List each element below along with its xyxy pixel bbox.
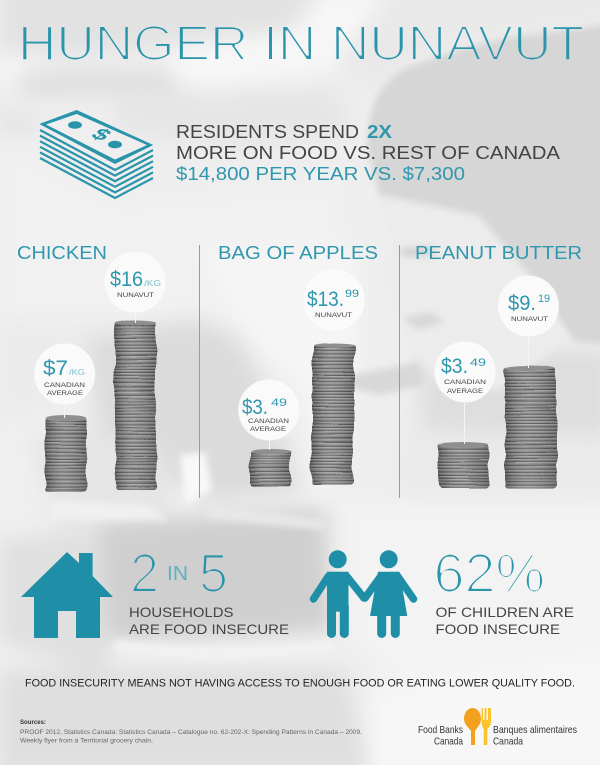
sources: Weekly flyer from a Territorial grocery chain. (20, 738, 153, 744)
headline statistic text: $14,800 PER YEAR VS. $7,300 (176, 163, 465, 184)
heading: bag of apples: BAG OF APPLES (218, 242, 378, 263)
price callout: peanut butter Canadian average: CANADIAN (444, 379, 486, 386)
coin stack: apples Nunavut (312, 342, 354, 486)
price callout: apples Canadian average: CANADIAN (248, 418, 289, 425)
price callout: apples Nunavut: NUNAVUT (315, 312, 352, 319)
coin stack: chicken Nunavut (115, 320, 156, 489)
heading: chicken: CHICKEN (17, 242, 107, 263)
coin stack: chicken Canadian average (45, 415, 86, 491)
price callout: chicken Canadian average: CANADIAN (44, 382, 85, 389)
price callout: peanut butter Nunavut: $9. (508, 292, 536, 315)
logo: Food Banks Canada: Canada (493, 736, 523, 748)
price callout: peanut butter Canadian average: $3. (441, 355, 468, 378)
icon: house (21, 552, 113, 638)
price callout: chicken Canadian average: AVERAGE (47, 390, 84, 397)
price callout: peanut butter Canadian average: AVERAGE (447, 388, 484, 395)
logo: Food Banks Canada: Banques alimentaires (493, 724, 577, 736)
logo: Food Banks Canada (418, 708, 577, 748)
logo: Food Banks Canada: Food Banks (418, 724, 463, 736)
price callout: chicken Nunavut (105, 252, 165, 323)
headline statistic text (176, 121, 561, 184)
price callout: apples Nunavut: 99 (345, 288, 359, 300)
statistic: 2 in 5 households: 5 (199, 542, 228, 604)
heading: peanut butter: PEANUT BUTTER (415, 242, 582, 263)
sources (20, 719, 362, 744)
statistic: 2 in 5 households: IN (167, 562, 188, 585)
statistic: 2 in 5 households (129, 542, 289, 637)
icon: stack of money: $ (86, 125, 117, 144)
icon: stack of money (39, 110, 153, 198)
definition statement: FOOD INSECURITY MEANS NOT HAVING ACCESS TO ENOUGH FOOD OR EATING LOWER QUALITY FOOD. (25, 678, 575, 690)
coin stack: peanut butter Canadian average (439, 442, 489, 489)
price callout: apples Canadian average: $3. (242, 396, 268, 419)
statistic: 2 in 5 households: ARE FOOD INSECURE (129, 621, 289, 637)
coin stack: peanut butter Nunavut (505, 365, 556, 489)
price callout: chicken Canadian average: $7 (43, 357, 68, 380)
statistic: 62 percent of children: FOOD INSECURE (436, 621, 560, 637)
logo: Food Banks Canada: Canada (434, 736, 463, 748)
statistic: 62 percent of children: OF CHILDREN ARE (436, 604, 574, 620)
statistic: 62 percent of children (434, 542, 574, 637)
statistic: 62 percent of children: 62% (434, 542, 545, 604)
price callout: peanut butter Nunavut: 19 (538, 293, 550, 305)
sources: Sources: (20, 719, 46, 726)
price callout: peanut butter Canadian average: 49 (470, 357, 486, 369)
price callout: chicken Canadian average: /KG (69, 368, 85, 377)
title: HUNGER IN NUNAVUT (18, 16, 584, 71)
sources: PROOF 2012, Statistics Canada: Statistics Canada – Catalogue no. 62-202-X: Spending Patterns in Canada – 2009. (20, 729, 362, 736)
headline statistic text: RESIDENTS SPEND (176, 121, 359, 142)
price callout: peanut butter Canadian average (435, 342, 495, 444)
icon: two children holding hands (314, 550, 414, 634)
price callout: apples Nunavut: $13. (307, 288, 344, 311)
price callout: chicken Canadian average (35, 344, 95, 418)
price callout: chicken Nunavut: /KG (144, 279, 161, 288)
price callout: apples Canadian average (239, 380, 299, 450)
price callout: chicken Nunavut: $16 (110, 268, 143, 291)
coin stack: apples Canadian average (250, 448, 291, 487)
price callout: peanut butter Nunavut (498, 276, 558, 368)
price callout: peanut butter Nunavut: NUNAVUT (511, 316, 548, 323)
headline statistic text: MORE ON FOOD VS. REST OF CANADA (176, 142, 561, 163)
price callout: apples Canadian average: AVERAGE (250, 426, 287, 433)
price callout: apples Canadian average: 49 (271, 397, 287, 409)
price callout: chicken Nunavut: NUNAVUT (117, 292, 154, 299)
headline statistic text: 2X (367, 121, 393, 142)
price callout: apples Nunavut (304, 270, 364, 343)
statistic: 2 in 5 households: HOUSEHOLDS (129, 604, 234, 620)
statistic: 2 in 5 households: 2 (130, 542, 159, 604)
